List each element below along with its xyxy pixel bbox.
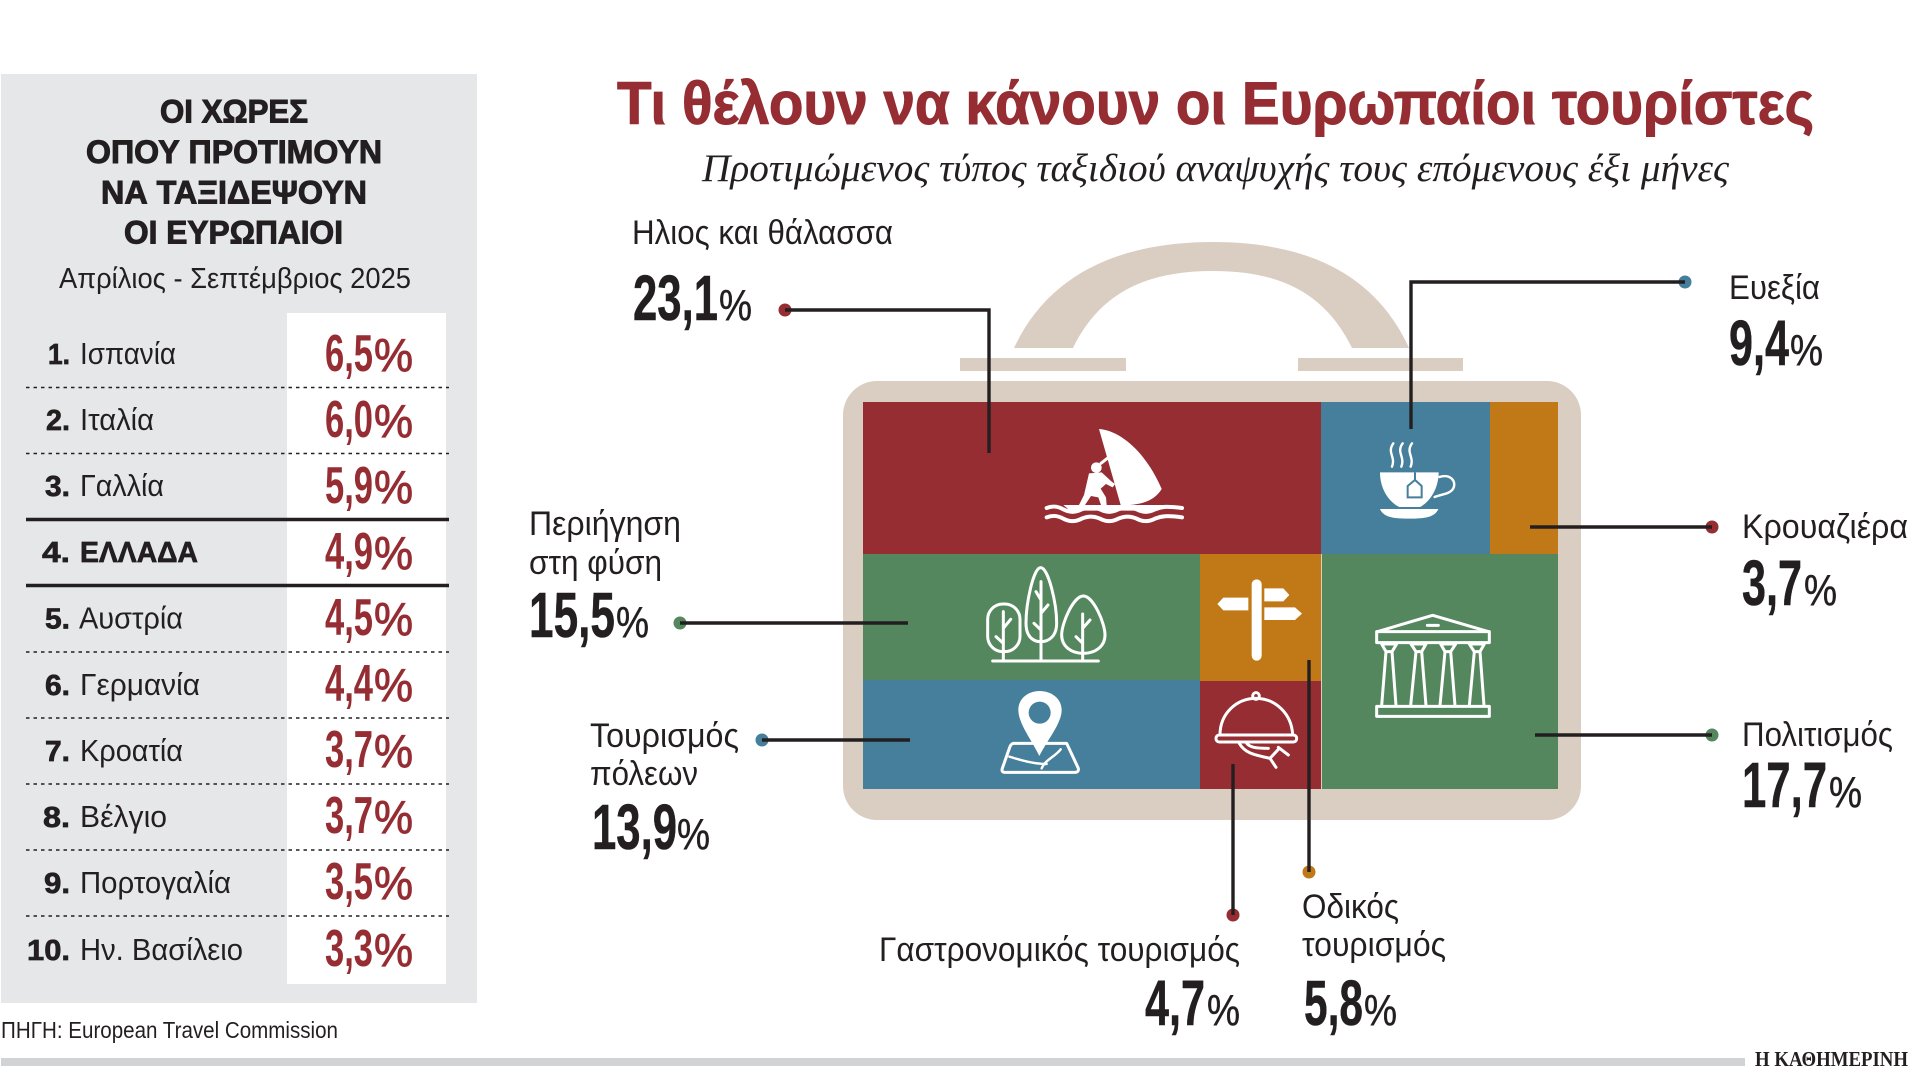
panel heading: ΟΠΟΥ ΠΡΟΤΙΜΟΥΝ [86, 134, 382, 170]
row 7: 3,7 [325, 721, 373, 779]
label: culture 17,7%: 17,7 [1742, 749, 1827, 821]
row 1: % [374, 329, 413, 381]
row 10: Ην. Βασίλειο [80, 932, 243, 967]
row 4: ΕΛΛΑΔΑ [80, 537, 198, 569]
label: wellness 9,4%: Ευεξία [1729, 269, 1820, 307]
panel: country ranking [1, 74, 477, 1003]
row 6: 6. [45, 670, 70, 702]
panel heading: ΝΑ ΤΑΞΙΔΕΨΟΥΝ [101, 174, 367, 210]
row 10: 10. [27, 935, 70, 967]
row 7: 7. [45, 736, 70, 768]
label: sun and sea 23,1% [632, 214, 893, 334]
label: cruise 3,7%: % [1804, 566, 1837, 615]
row 9: 9. [44, 868, 70, 900]
row 4: % [374, 527, 413, 579]
row 4: 4,9 [325, 523, 373, 581]
panel date range: Απρίλιος - Σεπτέμβριος 2025 [59, 263, 411, 295]
row 2: Ιταλία [80, 402, 154, 437]
row 3: 3. [45, 471, 70, 503]
label: culture 17,7%: Πολιτισμός [1742, 716, 1893, 754]
label: nature 15,5%: Περιήγηση [529, 505, 681, 543]
row 10: 3,3 [325, 920, 373, 978]
label: wellness 9,4%: % [1790, 326, 1823, 375]
panel heading: ΟΙ ΕΥΡΩΠΑΙΟΙ [124, 214, 343, 250]
label: nature 15,5%: στη φύση [529, 544, 662, 582]
label: wellness 9,4%: 9,4 [1729, 307, 1789, 379]
row 3 [45, 457, 413, 515]
label: sun and sea 23,1%: 23,1 [633, 262, 718, 334]
row dividers [26, 388, 449, 916]
label: nature 15,5%: 15,5 [529, 579, 615, 651]
label: city tourism 13,9%: 13,9 [592, 791, 677, 863]
panel heading: ΟΙ ΧΩΡΕΣ [160, 94, 308, 130]
label: gastronomy 4,7%: % [1207, 986, 1240, 1035]
icon: map pin [1002, 691, 1078, 772]
label: city tourism 13,9%: Τουρισμός [590, 717, 739, 755]
row 8: 8. [43, 802, 70, 834]
row 2: 6,0 [325, 391, 373, 449]
row 2 [46, 391, 413, 449]
label: nature 15,5% [529, 505, 681, 651]
percent column background [287, 313, 446, 984]
tile: city tourism [863, 680, 1200, 789]
row 6 [45, 655, 413, 713]
row 3: Γαλλία [80, 468, 164, 503]
label: culture 17,7% [1742, 716, 1893, 821]
leader line: gastronomy [1226, 764, 1240, 922]
row 8 [43, 787, 413, 845]
leader line: culture [1535, 728, 1718, 742]
label: road tourism 5,8%: τουρισμός [1302, 926, 1446, 964]
label: city tourism 13,9%: % [677, 810, 710, 859]
label: city tourism 13,9% [590, 717, 739, 863]
label: gastronomy 4,7%: 4,7 [1145, 967, 1205, 1039]
label: cruise 3,7%: Κρουαζιέρα [1742, 508, 1908, 546]
row 8: Βέλγιο [80, 799, 167, 834]
label: sun and sea 23,1%: Ηλιος και θάλασσα [632, 214, 893, 252]
suitcase body [843, 381, 1581, 820]
row 1: 6,5 [325, 325, 373, 383]
row 9: 3,5 [325, 853, 373, 911]
row 10 [27, 920, 413, 978]
suitcase illustration [674, 242, 1718, 922]
row 6: Γερμανία [80, 667, 200, 702]
tile: road tourism [1200, 554, 1321, 681]
label: road tourism 5,8%: 5,8 [1304, 967, 1363, 1039]
label: road tourism 5,8%: Οδικός [1302, 888, 1399, 926]
icon: signpost [1217, 579, 1302, 661]
row 3: % [374, 461, 413, 513]
row 1 [48, 325, 413, 383]
leader line: nature [674, 616, 908, 630]
row 8: 3,7 [325, 787, 373, 845]
row 5: Αυστρία [79, 600, 183, 636]
row 6: % [374, 659, 413, 711]
tile: nature [863, 554, 1200, 680]
row 1: Ισπανία [80, 336, 176, 371]
tile: wellness [1321, 402, 1490, 554]
icon: tea cup [1380, 443, 1454, 519]
row 1: 1. [48, 339, 70, 371]
row 6: 4,4 [325, 655, 373, 713]
label: cruise 3,7% [1742, 508, 1908, 619]
label: gastronomy 4,7%: Γαστρονομικός τουρισμός [879, 931, 1240, 969]
label: wellness 9,4% [1729, 269, 1823, 379]
label: road tourism 5,8% [1302, 888, 1446, 1039]
icon: serving cloche [1216, 693, 1297, 767]
row 9: Πορτογαλία [80, 865, 231, 900]
row 10: % [374, 924, 413, 976]
row 5: % [374, 593, 413, 645]
subtitle: Προτιμώμενος τύπος ταξιδιού αναψυχής τους επόμενους έξι μήνες [701, 147, 1729, 190]
tile: sun and sea [863, 402, 1321, 554]
row 7: % [374, 725, 413, 777]
tile: gastronomy [1200, 681, 1321, 789]
label: road tourism 5,8%: % [1364, 986, 1397, 1035]
row 7 [45, 721, 413, 779]
footer bar [1, 1058, 1745, 1066]
label: gastronomy 4,7% [879, 931, 1240, 1039]
source note: ΠΗΓΗ: European Travel Commission [1, 1017, 338, 1043]
row 2: % [374, 395, 413, 447]
icon: trees [988, 568, 1105, 661]
row 5 [45, 589, 413, 647]
suitcase handle [960, 242, 1463, 371]
label: cruise 3,7%: 3,7 [1742, 547, 1802, 619]
tile: cruise [1490, 402, 1558, 554]
tile: culture [1322, 554, 1558, 789]
label: culture 17,7%: % [1829, 768, 1862, 817]
leader line: cruise [1530, 520, 1718, 534]
icon: temple [1377, 615, 1489, 716]
row 5: 5. [45, 604, 70, 636]
label: city tourism 13,9%: πόλεων [590, 755, 698, 793]
row 9: % [374, 857, 413, 909]
row 2: 2. [46, 405, 70, 437]
row 8: % [374, 791, 413, 843]
title: Τι θέλουν να κάνουν οι Ευρωπαίοι τουρίστες [617, 70, 1814, 137]
panel heading [86, 94, 382, 250]
row 5: 4,5 [325, 589, 373, 647]
row 4: 4. [42, 537, 70, 569]
row 7: Κροατία [80, 733, 183, 768]
label: sun and sea 23,1%: % [719, 281, 752, 330]
leader line: city tourism [756, 734, 910, 746]
leader line: wellness [1411, 276, 1692, 429]
row 4 [42, 523, 413, 581]
icon: windsurfer [1047, 429, 1182, 521]
label: nature 15,5%: % [616, 598, 649, 647]
row 3: 5,9 [325, 457, 373, 515]
row 9 [44, 853, 413, 911]
leader line: sun and sea [778, 304, 989, 453]
leader line: road tourism [1302, 660, 1316, 878]
